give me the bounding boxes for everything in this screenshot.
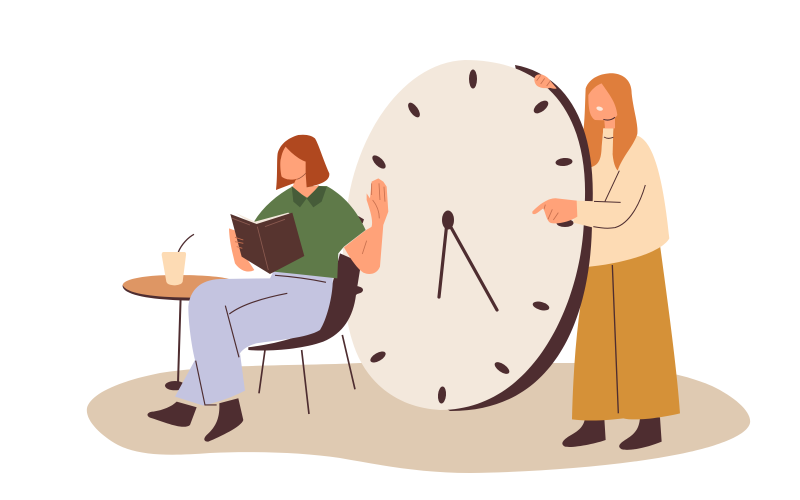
clock rim [440, 65, 593, 411]
clock hands [439, 210, 497, 310]
skirt and shoes [562, 245, 680, 450]
left hand [229, 228, 254, 272]
table top [123, 275, 230, 301]
side table with cup [123, 234, 230, 390]
standing woman arms and hands [532, 74, 645, 228]
green shirt [254, 186, 366, 278]
trousers [175, 272, 333, 406]
cup and straw [162, 234, 194, 285]
table pole and base [165, 297, 185, 390]
head, neck and collar [276, 135, 329, 207]
clock [343, 60, 593, 411]
clock face [343, 60, 585, 410]
sweater and head [573, 73, 669, 273]
chair [248, 216, 364, 414]
clock tick marks [347, 70, 574, 404]
book [230, 213, 304, 274]
ground shape [87, 363, 750, 473]
shoes [148, 398, 243, 442]
raised arm and hand [344, 178, 388, 274]
standing woman body [562, 73, 680, 450]
seated woman [148, 135, 388, 442]
